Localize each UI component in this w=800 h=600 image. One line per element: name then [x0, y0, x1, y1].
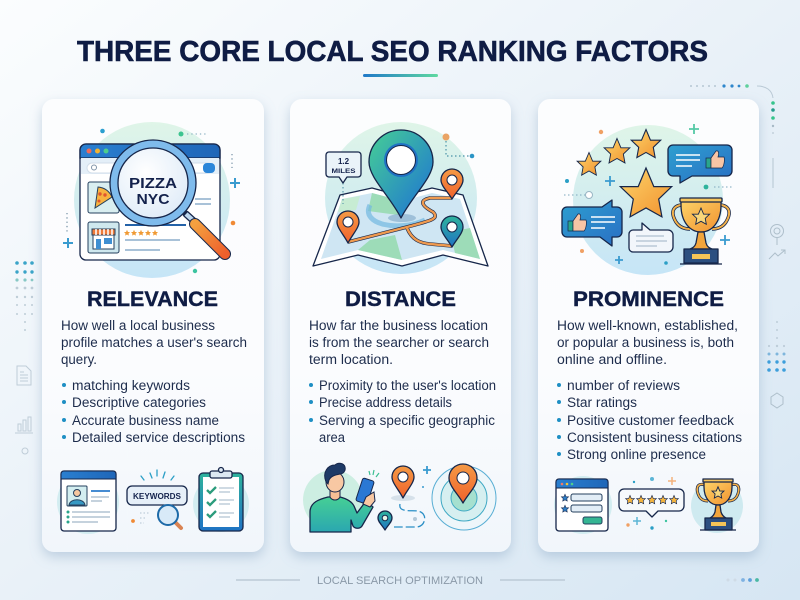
- description: query.: [61, 352, 97, 367]
- footer: [236, 575, 759, 587]
- icon: browser search with magnifier: [63, 122, 240, 278]
- right decoration: [690, 84, 786, 408]
- panel: relevance: [42, 99, 264, 552]
- magnifier text: [129, 175, 177, 208]
- heading: DISTANCE: [345, 288, 456, 311]
- icon: map with pins: [313, 122, 488, 274]
- bullet list: Consistent business citations: [567, 430, 742, 445]
- icon: location rings: [432, 464, 496, 530]
- card background: [42, 99, 264, 552]
- icon: review form window: [554, 476, 612, 534]
- icon: keywords magnifier: [127, 470, 187, 528]
- bullet list: Detailed service descriptions: [72, 430, 245, 445]
- description: profile matches a user's search: [61, 335, 247, 350]
- description: How well a local business: [61, 318, 215, 333]
- bullet list: number of reviews: [567, 378, 680, 393]
- description: How far the business location: [309, 318, 488, 333]
- icon: checklist clipboard: [193, 468, 249, 532]
- bullet list: matching keywords: [72, 378, 190, 393]
- distance label: [326, 152, 361, 183]
- icon: small trophy: [691, 479, 743, 533]
- bullet list: [309, 378, 496, 445]
- keywords label: KEYWORDS: [133, 492, 182, 501]
- description: [309, 318, 489, 367]
- panel: prominence: [538, 99, 759, 552]
- description: or popular a business is, both: [557, 335, 734, 350]
- title: THREE CORE LOCAL SEO RANKING FACTORS: [77, 36, 708, 68]
- distance label: 1.2: [338, 157, 350, 166]
- panel: distance: [290, 99, 511, 552]
- icon: profile window: [57, 470, 119, 534]
- bullet list: Proximity to the user's location: [319, 378, 496, 393]
- card background: [538, 99, 759, 552]
- description: online and offline.: [557, 352, 667, 367]
- bullet list: Strong online presence: [567, 447, 706, 462]
- title underline: [363, 74, 438, 77]
- bullet list: [557, 378, 742, 462]
- bullet list: Positive customer feedback: [567, 413, 734, 428]
- magnifier text: PIZZA: [129, 175, 177, 192]
- left decoration: [15, 261, 34, 454]
- card background: [290, 99, 511, 552]
- description: [61, 318, 247, 367]
- icon: stars, reviews and trophy: [562, 124, 733, 275]
- description: [557, 318, 738, 367]
- description: term location.: [309, 352, 393, 367]
- heading: PROMINENCE: [573, 288, 724, 311]
- description: is from the searcher or search: [309, 335, 489, 350]
- footer label: LOCAL SEARCH OPTIMIZATION: [317, 575, 483, 587]
- magnifier text: NYC: [136, 191, 170, 208]
- bullet list: Accurate business name: [72, 413, 219, 428]
- icon: route pins: [378, 466, 431, 530]
- distance label: MILES: [332, 168, 356, 175]
- bullet list: [62, 378, 245, 445]
- bullet list: area: [319, 430, 345, 445]
- icon: person with phone: [303, 463, 379, 532]
- bullet list: Star ratings: [567, 395, 637, 410]
- icon: five star bubble: [619, 477, 684, 530]
- bullet list: Descriptive categories: [72, 395, 206, 410]
- bullet list: Precise address details: [319, 395, 452, 410]
- heading: RELEVANCE: [87, 288, 218, 311]
- bullet list: Serving a specific geographic: [319, 413, 495, 428]
- description: How well-known, established,: [557, 318, 738, 333]
